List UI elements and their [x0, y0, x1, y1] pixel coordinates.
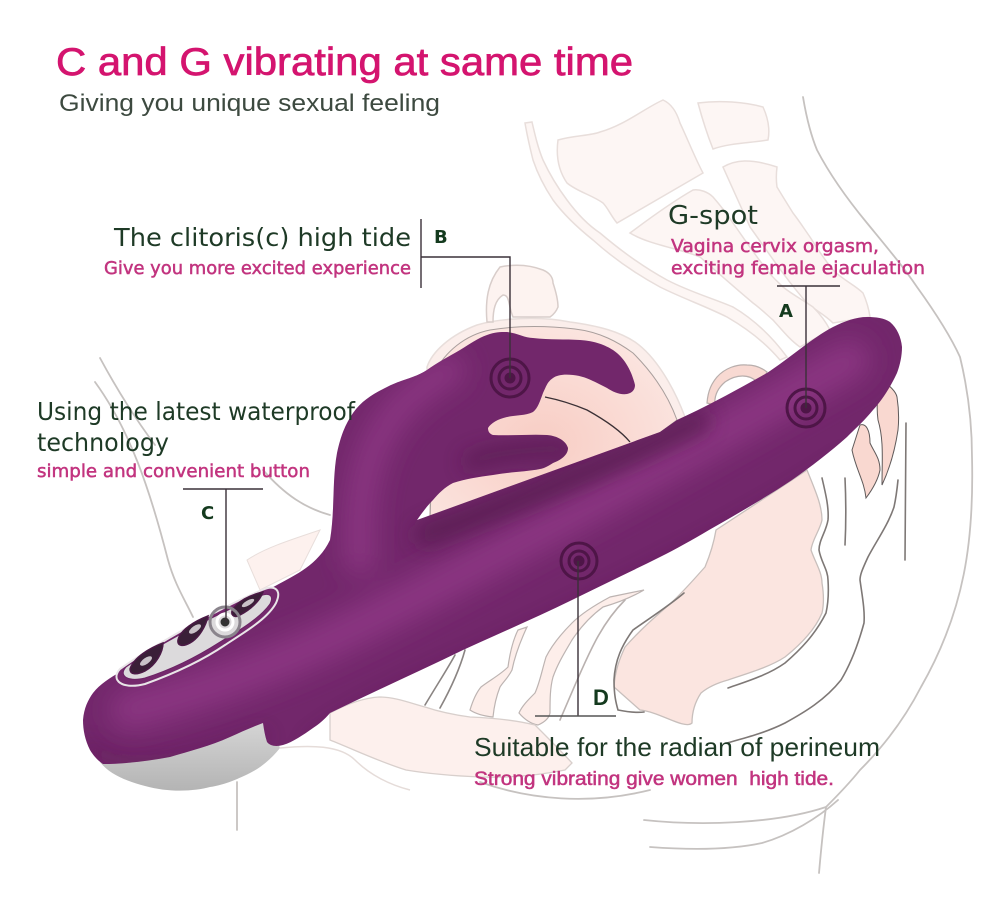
icon: vibration C: [210, 607, 240, 637]
callout: perineum: [474, 685, 880, 790]
callout: clitoris: B: [434, 227, 448, 248]
device: [60, 300, 920, 791]
callout: clitoris: [104, 223, 448, 279]
vaginal strips: [470, 590, 644, 725]
body outline back: [95, 97, 972, 873]
callout: waterproof: C: [201, 503, 214, 524]
callout: G-spot: A: [779, 301, 793, 322]
icon: buttons: [130, 592, 263, 674]
callout: G-spot: [668, 201, 925, 322]
callout leader lines: [183, 219, 840, 716]
callout: clitoris: The clitoris(c) high tide: [113, 223, 411, 252]
control panel: [116, 588, 278, 686]
dark tissue lines: [425, 423, 906, 743]
rectum: [614, 470, 824, 725]
uterus: [427, 318, 685, 525]
title: C and G vibrating at same time: [56, 41, 633, 84]
bladder top: [486, 265, 558, 322]
ovary ring: [707, 365, 767, 405]
anatomical diagram background: [95, 97, 972, 873]
left soft band: [247, 530, 320, 590]
shading: dark edges: [89, 408, 714, 760]
callout: perineum: D: [593, 685, 609, 710]
callout: perineum: Strong vibrating give women high tide.: [474, 769, 834, 790]
vibration rings A B C D: [210, 359, 825, 637]
icon: vibration B: [491, 359, 529, 397]
silver base: [100, 720, 280, 791]
callout: clitoris: Give you more excited experience: [104, 258, 411, 279]
shading: highlights: [130, 360, 850, 710]
lower soft tissue: [330, 697, 572, 777]
callout: G-spot: Vagina cervix orgasm,: [671, 236, 879, 257]
callout: waterproof: simple and convenient button: [37, 461, 310, 482]
icon: vibration A: [787, 389, 825, 427]
callout: waterproof: Using the latest waterproof: [37, 397, 356, 426]
callout: waterproof: technology: [37, 428, 169, 457]
callout: G-spot: exciting female ejaculation: [671, 258, 925, 279]
callout: G-spot: G-spot: [668, 201, 758, 231]
purple body: [83, 317, 902, 764]
cervix strands: [852, 380, 899, 498]
subtitle: Giving you unique sexual feeling: [59, 90, 440, 117]
callout: perineum: Suitable for the radian of perineum: [474, 732, 880, 762]
icon: vibration D: [561, 543, 597, 579]
callout: waterproof: [37, 397, 356, 524]
sacrum bones: [525, 100, 870, 360]
